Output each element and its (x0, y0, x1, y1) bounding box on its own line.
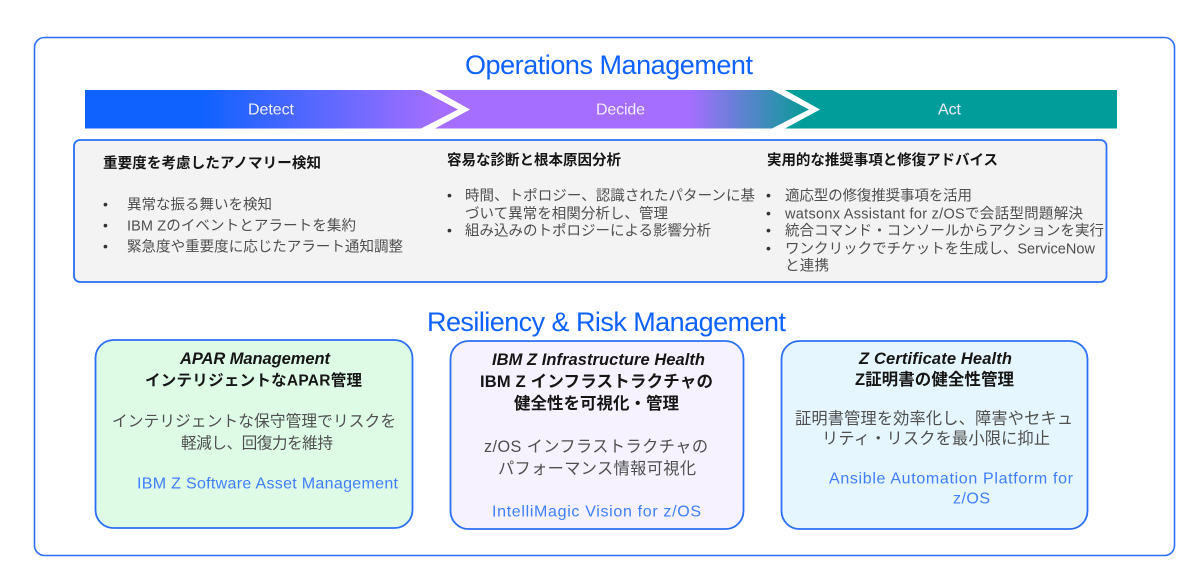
column: detect: • (103, 238, 108, 254)
column: act: ワンクリックでチケットを生成し、ServiceNow (785, 240, 1096, 258)
column: detect: IBM Zのイベントとアラートを集約 (127, 218, 356, 234)
column: decide: づいて異常を相関分析し、管理 (465, 204, 668, 222)
panel: IBM Z Infrastructure Health: 健全性を可視化・管理 (514, 393, 680, 413)
column: act: 統合コマンド・コンソールからアクションを実行 (785, 222, 1104, 240)
panel: Z Certificate Health: 証明書管理を効率化し、障害やセキュ (795, 410, 1073, 428)
column: act: • (766, 187, 771, 203)
column: detect: 異常な振る舞いを検知 (127, 196, 272, 214)
column: decide (447, 151, 756, 240)
panel: APAR Management: インテリジェントな保守管理でリスクを (112, 412, 396, 430)
heading: Resiliency & Risk Management: Resiliency & Risk Management (427, 307, 786, 337)
panel: APAR Management: IBM Z Software Asset Management (137, 476, 399, 492)
arrow: Decide: Decide (596, 102, 645, 118)
panel: APAR Management: 軽減し、回復力を維持 (181, 434, 333, 452)
column: decide: 時間、トポロジー、認識されたパターンに基 (465, 188, 756, 204)
column: act: 実用的な推奨事項と修復アドバイス (767, 151, 998, 169)
panel: APAR Management (96, 340, 412, 528)
column: act: • (766, 222, 771, 238)
column: decide: 組み込みのトポロジーによる影響分析 (465, 222, 711, 240)
column: detect: • (103, 196, 108, 212)
column: decide: • (447, 187, 452, 203)
panel: Z Certificate Health: リティ・リスクを最小限に抑止 (822, 430, 1050, 448)
column: act: • (766, 240, 771, 256)
column: detect: • (103, 217, 108, 233)
panel: operations details (74, 140, 1106, 282)
panel: Z Certificate Health: Ansible Automation Platform for (829, 470, 1074, 488)
column: act (766, 151, 1104, 274)
column: decide: 容易な診断と根本原因分析 (447, 151, 622, 169)
column: detect: 重要度を考慮したアノマリー検知 (103, 154, 321, 172)
panel: Z Certificate Health: Z証明書の健全性管理 (855, 369, 1014, 389)
heading: Operations Management: Operations Management (465, 50, 753, 80)
arrow: Detect (85, 90, 458, 128)
panel: APAR Management: インテリジェントなAPAR管理 (145, 370, 362, 390)
column: act: と連携 (785, 258, 829, 274)
column: act: watsonx Assistant for z/OSで会話型問題解決 (784, 206, 1084, 222)
panel: IBM Z Infrastructure Health: IntelliMagic Vision for z/OS (492, 504, 701, 520)
arrow: Act (785, 90, 1117, 128)
panel: Z Certificate Health (782, 341, 1088, 529)
panel: APAR Management: APAR Management (179, 350, 332, 368)
arrow: Act: Act (938, 102, 962, 118)
column: detect (103, 154, 404, 256)
panel: IBM Z Infrastructure Health: パフォーマンス情報可視化 (498, 460, 696, 478)
arrow: Decide (435, 90, 809, 128)
panel: Z Certificate Health: Z Certificate Health (858, 350, 1012, 368)
column: act: • (766, 205, 771, 221)
panel: Z Certificate Health: z/OS (953, 490, 990, 508)
arrow: Detect: Detect (248, 102, 295, 118)
process arrows (85, 90, 1117, 128)
column: detect: 緊急度や重要度に応じたアラート通知調整 (127, 238, 404, 256)
column: act: 適応型の修復推奨事項を活用 (785, 188, 972, 204)
panel: IBM Z Infrastructure Health: IBM Z インフラストラクチャの (480, 372, 713, 391)
panel: IBM Z Infrastructure Health (450, 341, 744, 529)
panel: IBM Z Infrastructure Health: IBM Z Infrastructure Health (492, 351, 705, 369)
column: decide: • (447, 222, 452, 238)
panel: IBM Z Infrastructure Health: z/OS インフラストラクチャの (484, 438, 708, 456)
